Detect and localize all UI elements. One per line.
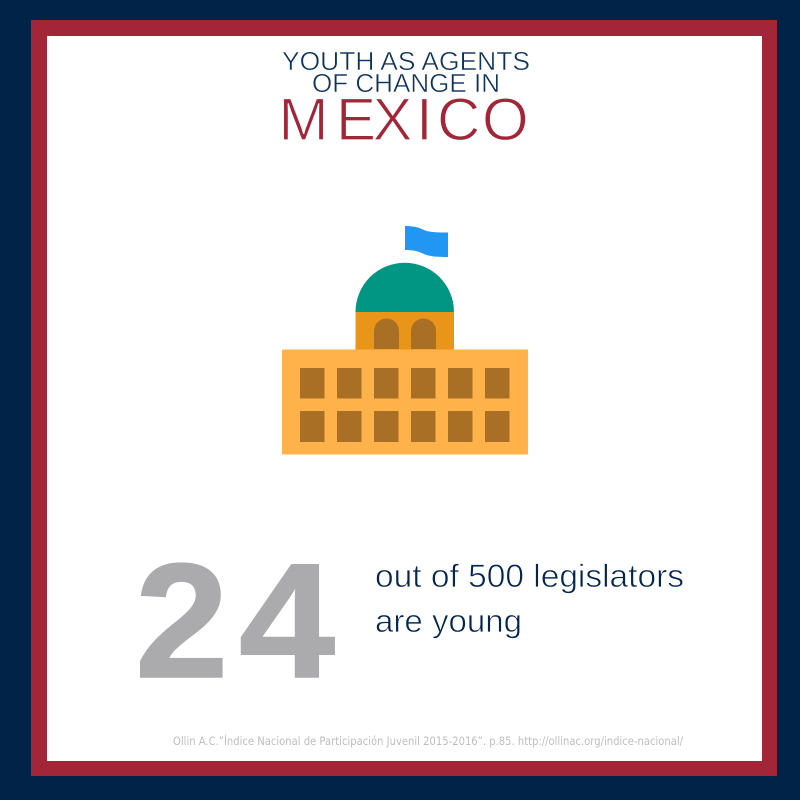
statistic text: out of 500 legislators — [375, 558, 684, 594]
big number 24: 2 — [135, 529, 228, 712]
building windows — [300, 368, 510, 442]
dome — [356, 263, 454, 312]
icon: government building — [282, 226, 528, 454]
title — [278, 46, 530, 153]
main building — [282, 350, 528, 454]
title: YOUTH AS AGENTS — [282, 46, 530, 76]
drum — [356, 312, 454, 350]
source citation: Ollin A.C.”Índice Nacional de Participación Juvenil 2015-2016”. p.85. http://ollinac.org/indice-nacional/ — [173, 733, 683, 748]
icon: blue flag — [405, 226, 448, 257]
title: MEXICO — [278, 86, 529, 153]
statistic text — [375, 558, 684, 639]
big number 24: 4 — [239, 529, 335, 712]
arched windows — [374, 318, 436, 349]
statistic text: are young — [375, 603, 522, 639]
big number 24 — [135, 529, 335, 712]
title: OF CHANGE IN — [312, 68, 500, 98]
